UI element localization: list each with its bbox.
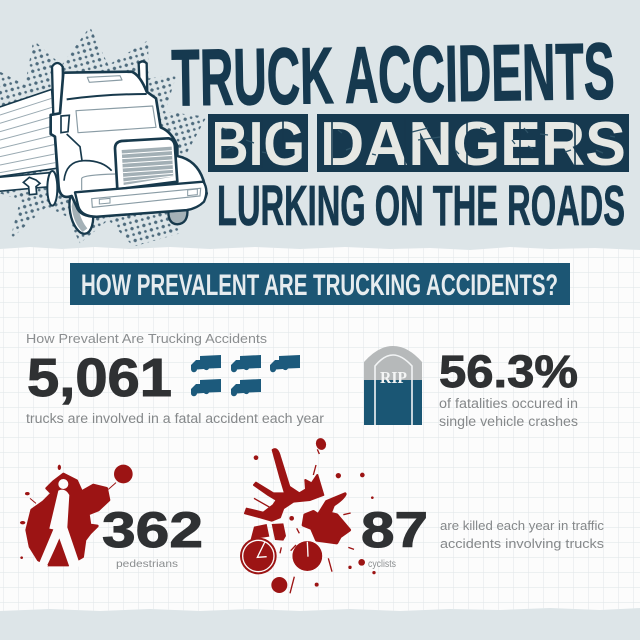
trailer: [0, 89, 57, 195]
icon: blood splat with pedestrian: [20, 465, 133, 567]
rear wheel: [66, 186, 187, 236]
stat: killed caption: are killed each year in traffic: [440, 519, 604, 533]
section banner: [70, 263, 570, 305]
panel: white grid paper: [0, 247, 640, 611]
stat: trucks intro label: How Prevalent Are Trucking Accidents: [26, 332, 267, 346]
icon: row of trucks: [191, 355, 300, 396]
cab body: [47, 72, 207, 217]
stat: fatalities caption: single vehicle crashes: [439, 414, 578, 429]
stat: trucks caption: trucks are involved in a fatal accident each year: [26, 411, 325, 426]
stat: 87: 87: [361, 502, 428, 558]
stat: pedestrians label: pedestrians: [116, 558, 178, 570]
halftone starburst: [0, 27, 207, 247]
title line 2: stamped boxes: DANGERS: [320, 110, 626, 179]
stat: 362: 362: [102, 502, 203, 558]
exhaust pipes: [52, 61, 147, 117]
stat: 56.3%: 56.3%: [439, 346, 578, 397]
stat: 5,061: 5,061: [27, 348, 172, 408]
title line 2: stamped boxes: BIG: [210, 110, 305, 179]
icon: truck with halftone burst: [0, 27, 207, 247]
grille: [115, 138, 177, 189]
stat: fatalities caption: of fatalities occured in: [439, 396, 578, 411]
stat: killed caption: accidents involving trucks: [440, 537, 604, 551]
icon: RIP gravestone: [364, 346, 422, 425]
icon: blood splat with cyclist: [240, 437, 376, 593]
bumper: [75, 182, 206, 217]
icon: RIP gravestone: RIP: [380, 368, 407, 387]
stat: cyclists label: cyclists: [368, 558, 396, 570]
